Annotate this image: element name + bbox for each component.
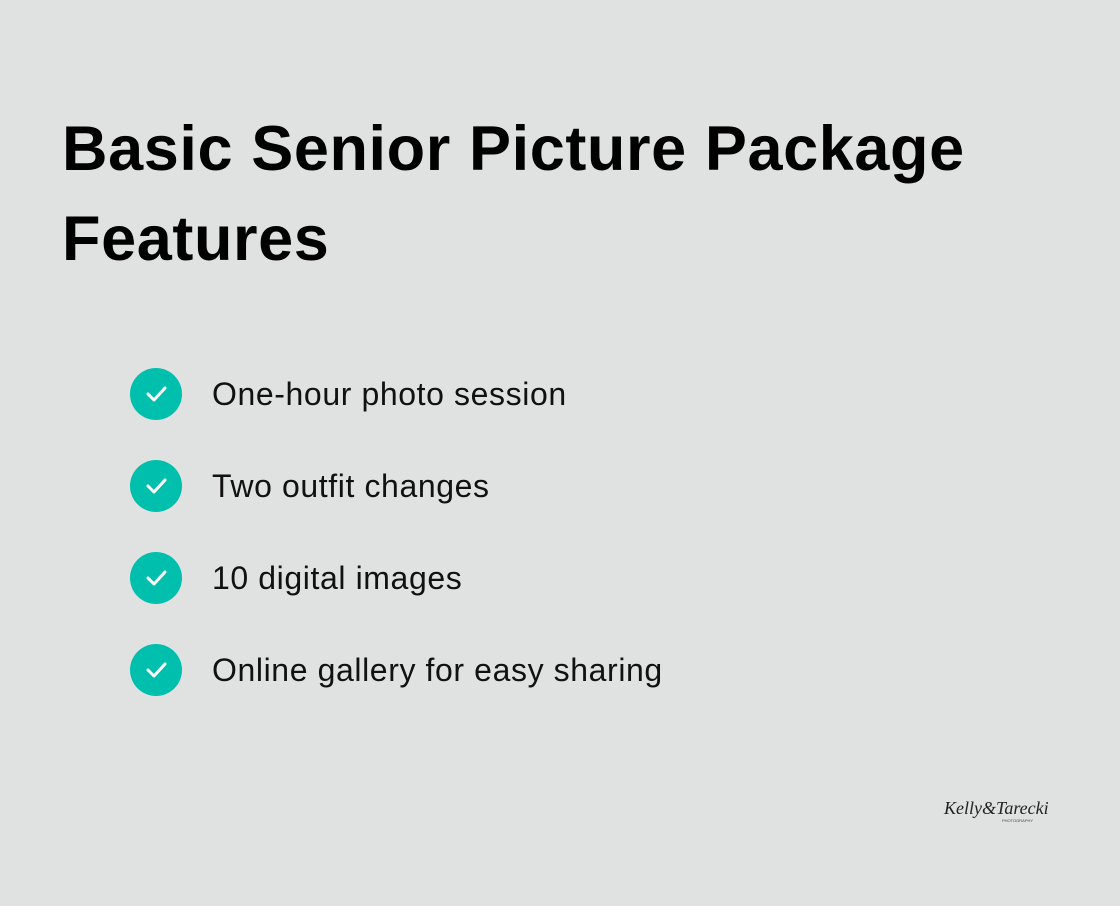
text: One-hour photo session bbox=[212, 376, 567, 412]
item: gallery bbox=[130, 644, 663, 696]
item: images bbox=[130, 552, 462, 604]
icon: check bbox=[130, 460, 182, 512]
logo: PHOTOGRAPHY bbox=[1002, 818, 1033, 823]
logo: Kelly&Tarecki bbox=[943, 798, 1049, 818]
title: Features bbox=[62, 204, 329, 274]
title: Basic Senior Picture Package bbox=[62, 114, 965, 184]
icon: check bbox=[130, 368, 182, 420]
text: Two outfit changes bbox=[212, 468, 490, 504]
icon: check bbox=[130, 644, 182, 696]
title bbox=[62, 114, 965, 274]
item: session bbox=[130, 368, 567, 420]
text: Online gallery for easy sharing bbox=[212, 652, 663, 688]
item: outfits bbox=[130, 460, 490, 512]
icon: check bbox=[130, 552, 182, 604]
text: 10 digital images bbox=[212, 560, 462, 596]
